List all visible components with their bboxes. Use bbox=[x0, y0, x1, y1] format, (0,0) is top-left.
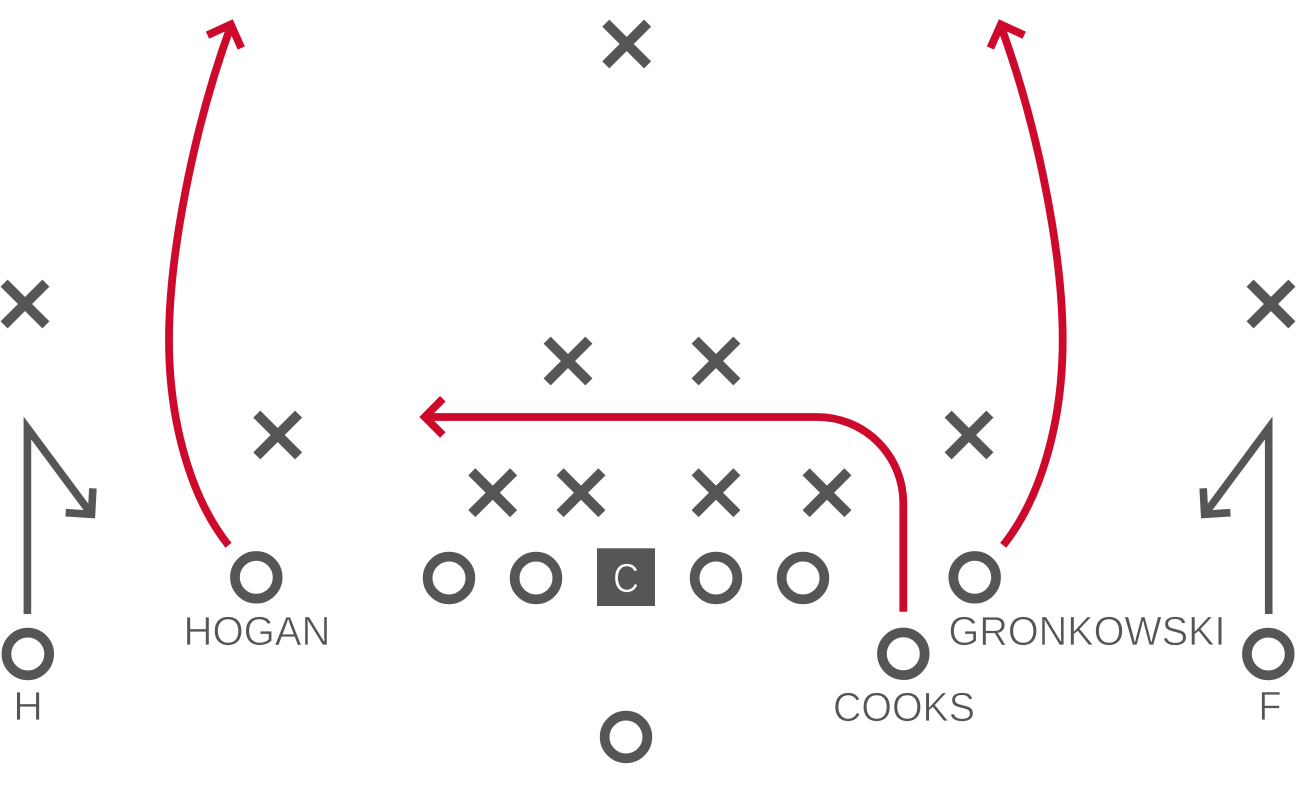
center bbox=[597, 548, 655, 606]
player labels bbox=[13, 608, 1282, 730]
route: Cooks bbox=[425, 399, 903, 612]
center: C bbox=[613, 555, 639, 601]
offensive players bbox=[6, 556, 1290, 758]
route: F bbox=[1203, 428, 1269, 614]
defenders bbox=[4, 23, 1292, 514]
route: H bbox=[27, 428, 93, 614]
label: H: H bbox=[13, 683, 43, 729]
route: Hogan bbox=[169, 24, 241, 545]
label: Gronkowski: GRONKOWSKI bbox=[948, 608, 1226, 654]
route: Gronkowski bbox=[990, 24, 1063, 545]
label: F: F bbox=[1258, 683, 1282, 729]
label: Cooks: COOKS bbox=[833, 684, 975, 730]
label: Hogan: HOGAN bbox=[184, 608, 330, 654]
